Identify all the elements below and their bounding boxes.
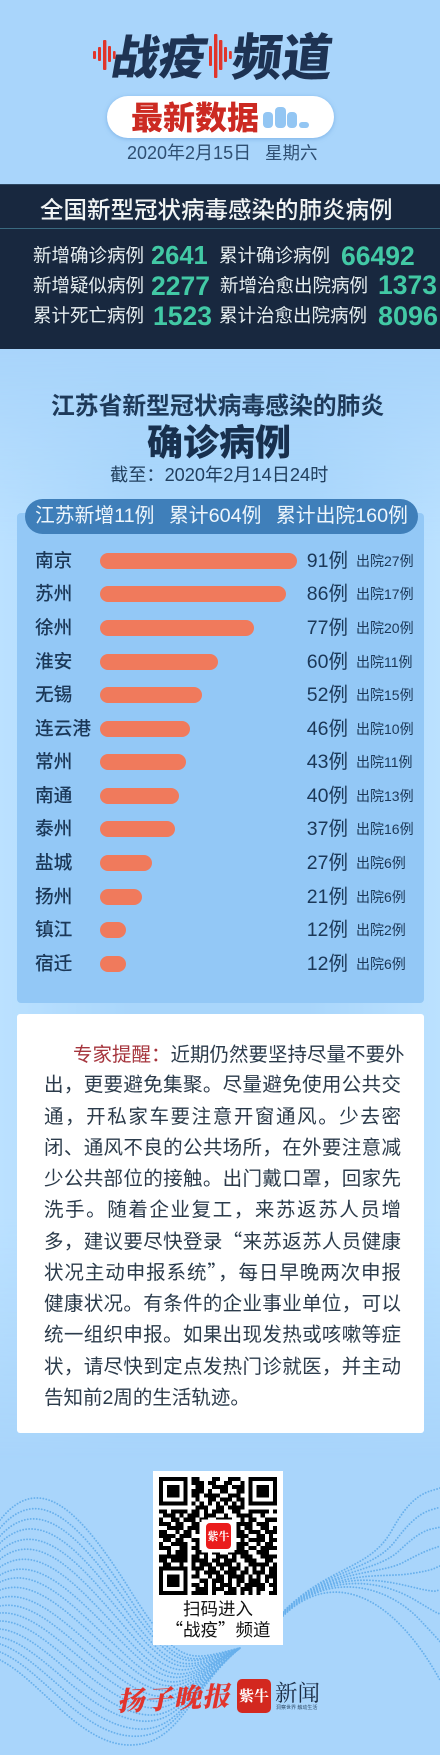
badge text: 最新数据	[131, 93, 259, 139]
stat: 新增确诊病例: 2641	[151, 242, 208, 270]
summary pill	[25, 499, 418, 534]
bar row: 扬州: 21例	[307, 886, 348, 908]
bar row: 宿迁: 12例	[307, 953, 348, 975]
panel: national data	[0, 184, 440, 349]
bar row: 南通: 出院13例	[356, 788, 414, 804]
badge: 最新数据	[107, 96, 334, 138]
bar row: 泰州	[35, 818, 414, 840]
bar row: 徐州: 77例	[307, 617, 348, 639]
bar row: 盐城: 盐城	[35, 852, 72, 873]
stat: 新增确诊病例	[33, 242, 208, 270]
QR code	[159, 1477, 277, 1595]
heading: 确诊病例: 确诊病例	[147, 414, 291, 466]
advice text block: 告知前2周的生活轨迹。	[44, 1381, 250, 1410]
bar row: 泰州: 泰州	[35, 818, 72, 839]
bar row: 常州: 出院11例	[356, 754, 413, 770]
stat: 累计确诊病例: 累计确诊病例	[219, 245, 330, 266]
icon: mini bar chart	[263, 107, 309, 128]
advice text block: 出，更要避免集聚。尽量避免使用公共交	[44, 1068, 401, 1097]
stat: 新增疑似病例: 2277	[151, 271, 210, 301]
bar row: 镇江: 镇江	[35, 919, 72, 940]
QR centre logo: 紫牛	[208, 1528, 230, 1544]
heading: 江苏省新型冠状病毒感染的肺炎: 江苏省新型冠状病毒感染的肺炎	[51, 386, 384, 421]
stat: 累计治愈出院病例	[219, 301, 438, 331]
date: 2020年2月15日	[127, 143, 251, 163]
advice text block: 状况主动申报系统”，每日早晚两次申报	[44, 1256, 401, 1285]
bar row: 泰州: 37例	[307, 818, 348, 840]
QR caption: 扫码进入	[183, 1596, 253, 1621]
logo: 扬子晚报: 扬子晚报	[116, 1674, 237, 1719]
bar row: 南通: 南通	[35, 785, 72, 806]
bar row: 常州: 43例	[307, 751, 348, 773]
logo: 新闻	[275, 1676, 320, 1711]
summary: 累计出院: 累计出院160例	[276, 505, 408, 527]
stat: 新增治愈出院病例	[220, 270, 437, 300]
summary: 累计: 累计604例	[169, 505, 261, 527]
bar row: 常州	[35, 751, 413, 773]
bar row: 宿迁: 出院6例	[356, 956, 406, 972]
bar row: 连云港: 出院10例	[356, 721, 414, 737]
advice text block: 统一组织申报。如果出现发热或咳嗽等症	[44, 1318, 401, 1347]
stat: 累计死亡病例: 累计死亡病例	[33, 305, 144, 326]
bar row: 苏州: 苏州	[35, 583, 72, 604]
bar row: 镇江: 12例	[307, 919, 348, 941]
bar row: 淮安: 淮安	[35, 651, 72, 672]
QR card	[153, 1471, 283, 1645]
bar row: 南京: 91例	[307, 550, 348, 572]
heading: 战疫: 战疫	[107, 19, 213, 88]
stat: 累计死亡病例	[33, 301, 212, 331]
bar row: 常州: 常州	[35, 751, 72, 772]
bar row: 淮安	[35, 651, 413, 673]
QR caption	[166, 1596, 270, 1642]
date note: 截至：2020年2月14日24时	[110, 465, 328, 485]
QR caption: “战疫”频道	[166, 1617, 270, 1642]
background glow	[0, 441, 440, 1346]
panel heading: 全国新型冠状病毒感染的肺炎病例	[40, 197, 392, 223]
bar row: 宿迁: 宿迁	[35, 953, 72, 974]
icon: red sound wave right	[209, 34, 232, 78]
stat: 累计确诊病例: 66492	[341, 241, 415, 271]
stat: 新增疑似病例: 新增疑似病例	[33, 275, 144, 296]
date	[127, 143, 318, 163]
bar row: 苏州	[35, 583, 414, 605]
bar row: 无锡: 无锡	[35, 684, 72, 705]
新闻 wordmark: 新闻	[275, 1676, 320, 1708]
bar row: 连云港: 46例	[307, 718, 348, 740]
icon: red sound wave left	[93, 40, 116, 70]
bar row: 南京	[35, 550, 414, 572]
summary: 江苏新增: 江苏新增11例	[35, 505, 154, 527]
bar row: 宿迁	[35, 953, 406, 975]
bar row: 盐城	[35, 852, 406, 874]
heading: 频道: 频道	[229, 18, 337, 90]
bar row: 无锡: 出院15例	[356, 687, 414, 703]
bar row: 南京: 出院27例	[356, 553, 414, 569]
stat: 累计治愈出院病例: 8096	[378, 301, 438, 331]
新闻 tagline: 洞察世界 触动生活	[276, 1705, 317, 1711]
advice text block: 专家提醒：近期仍然要坚持尽量不要外	[73, 1038, 405, 1067]
bar row: 徐州: 徐州	[35, 617, 72, 638]
stat: 新增确诊病例: 新增确诊病例	[33, 245, 144, 266]
stat: 累计治愈出院病例: 累计治愈出院病例	[219, 305, 367, 326]
panel: expert advice	[17, 1014, 424, 1433]
advice text block: 洗手。随着企业复工，来苏返苏人员增	[44, 1193, 401, 1222]
bar row: 无锡: 52例	[307, 684, 348, 706]
stat: 新增治愈出院病例: 1373	[378, 270, 437, 300]
stat: 累计确诊病例	[219, 241, 415, 271]
bar row: 淮安: 60例	[307, 651, 348, 673]
stat: 新增治愈出院病例: 新增治愈出院病例	[220, 275, 368, 296]
title logo: 战疫频道	[93, 18, 337, 90]
bar row: 扬州: 扬州	[35, 886, 72, 907]
advice text block: 健康状况。有条件的企业事业单位，可以	[44, 1287, 401, 1316]
divider	[0, 228, 440, 229]
bar row: 扬州	[35, 886, 406, 908]
panel: city bar chart	[17, 513, 424, 1003]
bar row: 苏州: 86例	[307, 583, 348, 605]
logo: 紫牛	[237, 1679, 271, 1713]
advice text block: 通，开私家车要注意开窗通风。少去密	[44, 1100, 401, 1129]
bar row: 镇江	[35, 919, 406, 941]
date: 星期六	[265, 143, 318, 163]
stat: 累计死亡病例: 1523	[153, 301, 212, 331]
QR centre logo	[206, 1523, 231, 1549]
dotted wave background	[0, 1487, 440, 1746]
bar row: 盐城: 出院6例	[356, 855, 406, 871]
stat: 新增疑似病例	[33, 271, 210, 301]
bar row: 无锡	[35, 684, 414, 706]
bar row: 盐城: 27例	[307, 852, 348, 874]
bar row: 苏州: 出院17例	[356, 586, 414, 602]
advice text block: 少公共部位的接触。出门戴口罩，回家先	[44, 1162, 401, 1191]
logo: 紫牛: 紫牛	[239, 1685, 269, 1706]
bar row: 泰州: 出院16例	[356, 821, 414, 837]
bar row: 南通: 40例	[307, 785, 348, 807]
advice text block	[44, 1038, 405, 1410]
bar row: 镇江: 出院2例	[356, 922, 406, 938]
advice text block: 闭、通风不良的公共场所，在外要注意减	[44, 1131, 401, 1160]
advice text block: 多，建议要尽快登录“来苏返苏人员健康	[44, 1225, 401, 1254]
advice text block: 状，请尽快到定点发热门诊就医，并主动	[44, 1350, 401, 1379]
bar row: 连云港: 连云港	[35, 718, 91, 739]
bar row: 南京: 南京	[35, 550, 72, 571]
bar row: 徐州: 出院20例	[356, 620, 414, 636]
bar row: 南通	[35, 785, 414, 807]
bar row: 淮安: 出院11例	[356, 654, 413, 670]
bar row: 扬州: 出院6例	[356, 889, 406, 905]
bar row: 连云港	[35, 718, 414, 740]
bar row: 徐州	[35, 617, 414, 639]
